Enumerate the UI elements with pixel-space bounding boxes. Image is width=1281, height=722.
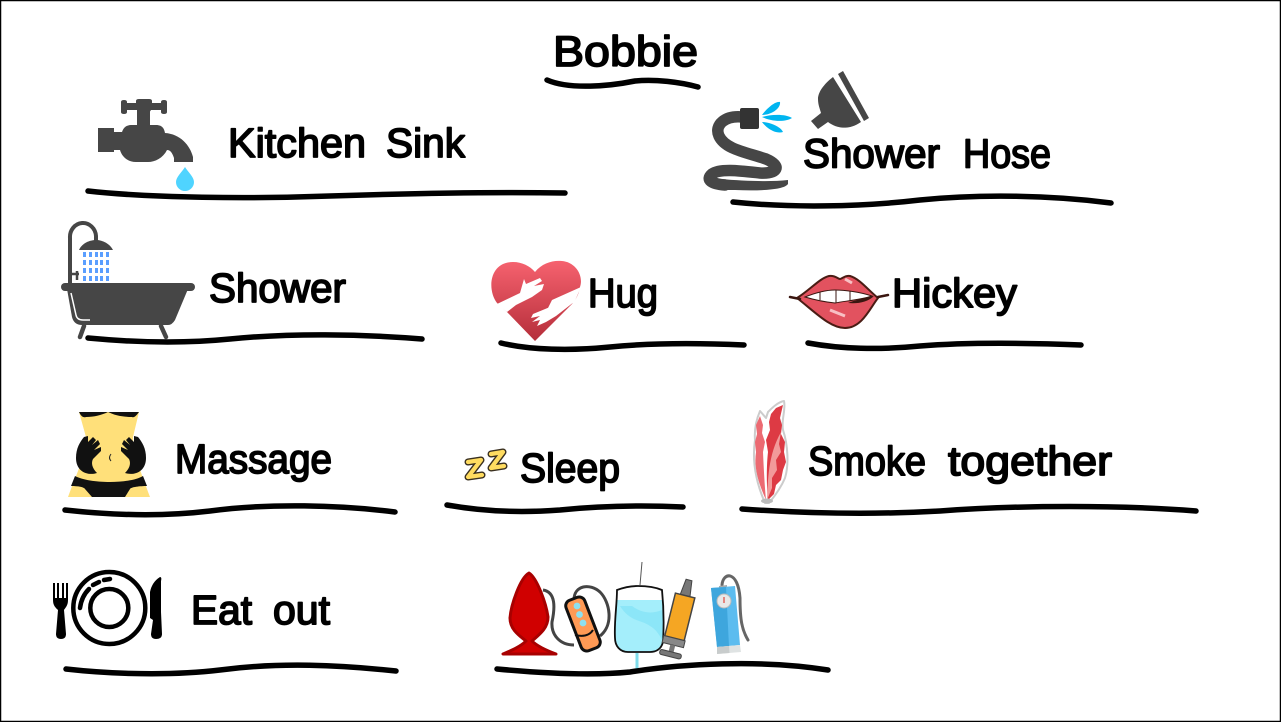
- item: supplies: [497, 562, 828, 674]
- underline: [742, 506, 1196, 513]
- label: Hug: Hug: [588, 270, 658, 316]
- item: Hickey: [790, 270, 1081, 348]
- icon: zzz: [468, 452, 504, 477]
- label: Eat out: out: [273, 587, 331, 633]
- icon: water drop: [176, 167, 194, 191]
- label: Shower Hose: Shower: [803, 130, 940, 176]
- underline: [88, 335, 422, 342]
- icon: orange remote: [564, 587, 609, 653]
- underline: [447, 505, 683, 511]
- label: Massage: Massage: [175, 436, 332, 482]
- icon: syringe: [659, 577, 700, 659]
- icon: torso with hands: [68, 412, 150, 497]
- label: Kitchen Sink: Kitchen: [228, 120, 366, 166]
- item: Kitchen Sink: [88, 99, 565, 198]
- icon: heart with hands: [491, 261, 581, 341]
- label: Sleep: Sleep: [520, 445, 620, 491]
- label: Smoke together: [808, 438, 1112, 484]
- underline: [808, 343, 1081, 348]
- underline: [501, 343, 744, 349]
- label: Shower Hose: [803, 130, 1051, 176]
- label: Eat out: [191, 587, 331, 633]
- underline: [497, 664, 828, 674]
- icon: bathtub with shower: [61, 223, 195, 337]
- icon: red plug: [503, 573, 574, 654]
- label: Kitchen Sink: [228, 120, 465, 166]
- icon: fluid bag: [615, 562, 664, 672]
- item: Hug: [491, 261, 744, 349]
- label: Shower: Shower: [209, 265, 346, 311]
- icon: blue pump: [711, 576, 748, 654]
- icon: red leaves: [754, 401, 787, 504]
- label: Hickey: Hickey: [892, 270, 1017, 316]
- label: Eat out: Eat: [191, 587, 253, 633]
- label: Smoke together: Smoke: [808, 438, 926, 484]
- icon: plunger: [811, 71, 869, 129]
- item: Eat out: [53, 572, 396, 674]
- label: Kitchen Sink: Sink: [386, 120, 465, 166]
- underline: [66, 665, 396, 674]
- title: Bobbie: Bobbie: [553, 28, 698, 76]
- item: Massage: [65, 412, 395, 515]
- underline: [733, 196, 1111, 206]
- icon: faucet: [98, 99, 194, 191]
- icon: plate and cutlery: [53, 572, 162, 644]
- item: Sleep: [447, 445, 683, 511]
- item: Shower: [61, 223, 422, 342]
- underline: [88, 191, 565, 198]
- icon: hose: [709, 102, 792, 190]
- item: Smoke together: [742, 401, 1196, 513]
- item: Shower Hose: [709, 71, 1111, 206]
- underline: [65, 506, 395, 515]
- label: Shower Hose: Hose: [963, 130, 1051, 176]
- label: Smoke together: together: [948, 438, 1112, 484]
- icon: lips: [790, 276, 888, 328]
